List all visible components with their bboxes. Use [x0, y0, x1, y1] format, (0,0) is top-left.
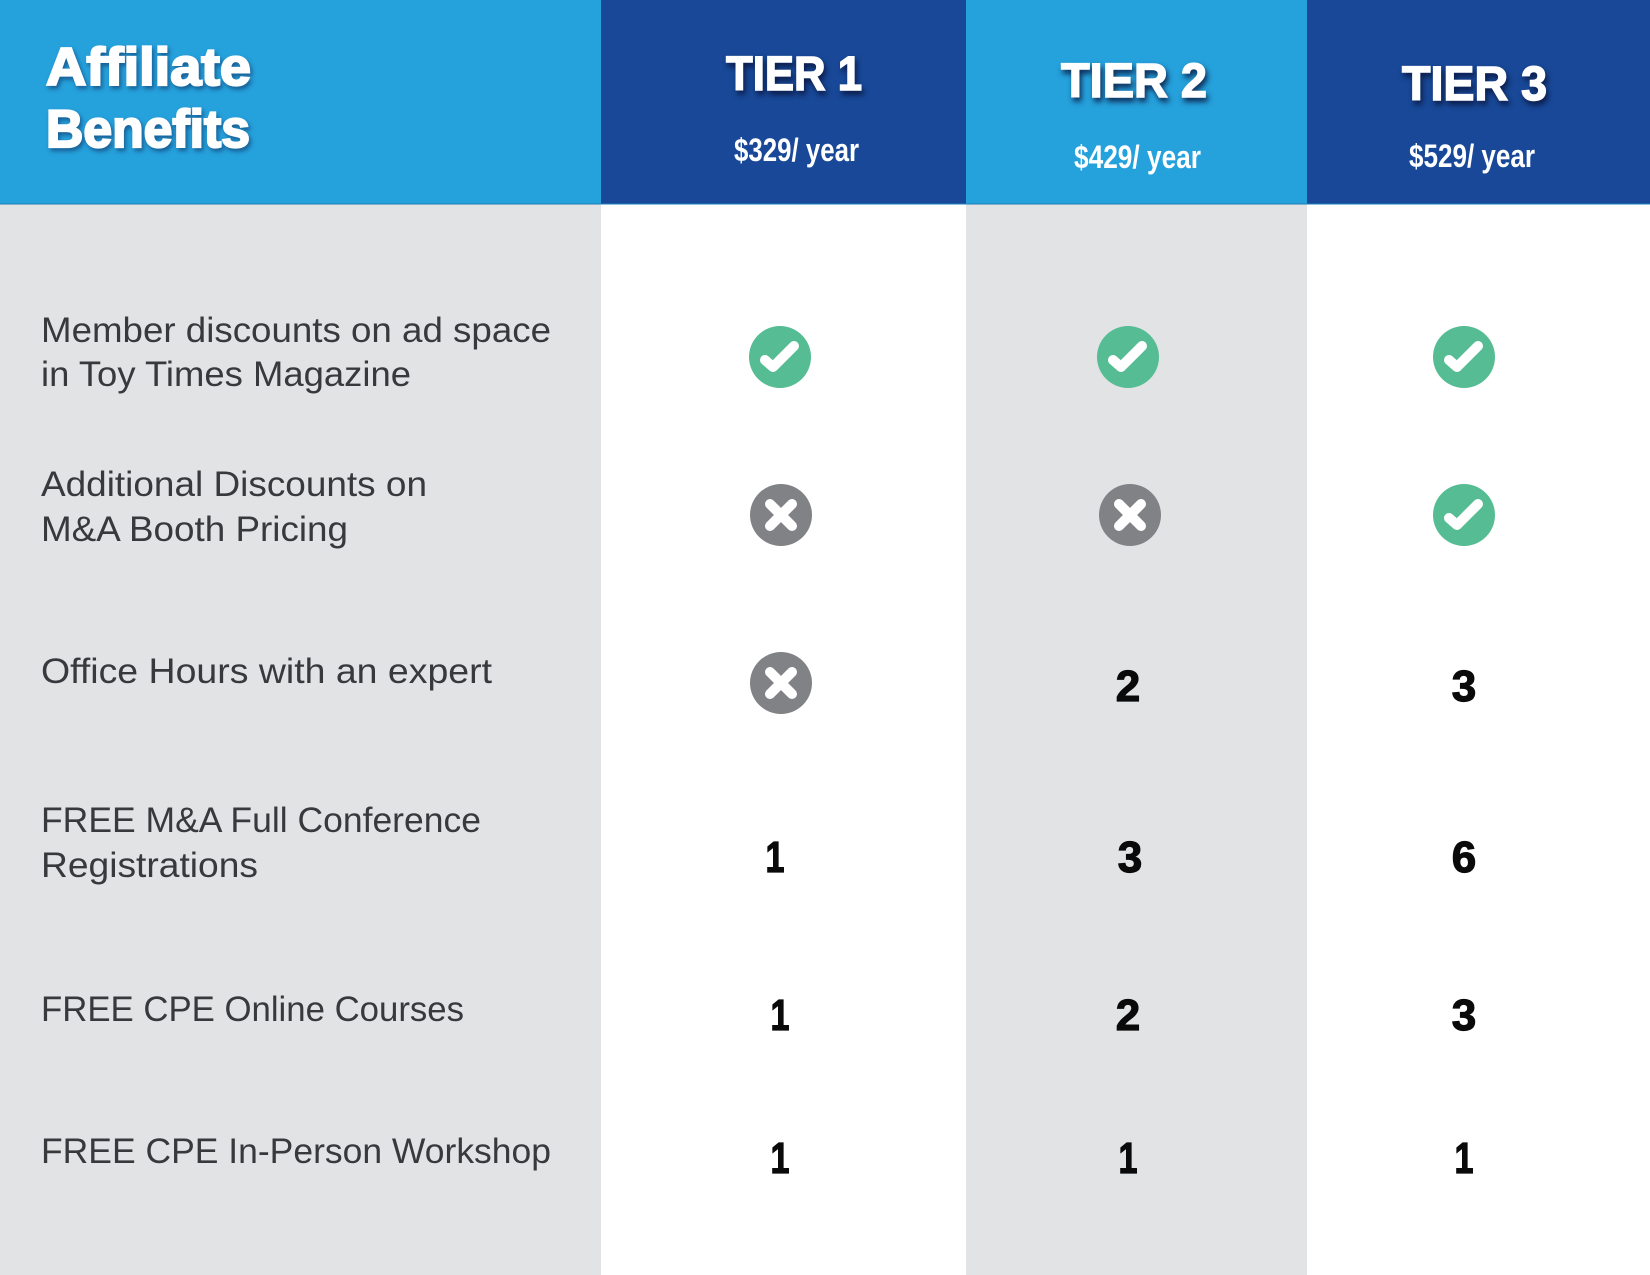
- icon: check tier 3: [1433, 484, 1495, 546]
- benefits column background: [0, 204, 601, 1275]
- row: additional discounts: [41, 465, 1495, 549]
- value tier 1: 1: [766, 833, 784, 882]
- icon: cross tier 1: [750, 484, 812, 546]
- label: additional discounts: M&A Booth Pricing: [41, 510, 348, 549]
- header panel: affiliate benefits: [0, 0, 601, 204]
- value tier 2: 2: [1116, 991, 1140, 1040]
- tier 1 price: $329/ year: [734, 132, 859, 168]
- row: office hours: [41, 652, 1476, 714]
- label: member discounts: Member discounts on ad space: [41, 311, 551, 350]
- value tier 1: 1: [770, 1134, 790, 1183]
- tier 1 name: TIER 1: [726, 48, 862, 101]
- tier 2 price: $429/ year: [1074, 139, 1201, 175]
- tier 3 name: TIER 3: [1402, 58, 1547, 111]
- tier 2 name: TIER 2: [1061, 55, 1207, 108]
- label: in-person workshop: FREE CPE In-Person Workshop: [41, 1132, 551, 1171]
- header panel: tier 3: [1307, 0, 1650, 204]
- row: member discounts: [41, 311, 1495, 394]
- value tier 2: 2: [1116, 662, 1140, 711]
- row: full conference registrations: [41, 801, 1476, 885]
- title: Benefits: [46, 100, 250, 159]
- title: [46, 38, 251, 159]
- icon: check tier 3: [1433, 326, 1495, 388]
- header panel: tier 2: [966, 0, 1307, 204]
- tier 3 price: $529/ year: [1409, 138, 1535, 174]
- icon: cross tier 1: [750, 652, 812, 714]
- icon: check tier 1: [749, 326, 811, 388]
- label: full conference registrations: FREE M&A Full Conference: [41, 801, 481, 840]
- value tier 3: 6: [1452, 833, 1476, 882]
- label: office hours: Office Hours with an expert: [41, 652, 492, 691]
- tier 2 column background: [966, 204, 1307, 1275]
- label: additional discounts: [41, 465, 427, 549]
- value tier 2: 1: [1118, 1134, 1138, 1183]
- label: full conference registrations: [41, 801, 481, 885]
- icon: cross tier 2: [1099, 484, 1161, 546]
- label: online courses: FREE CPE Online Courses: [41, 990, 464, 1029]
- value tier 3: 3: [1452, 662, 1476, 711]
- label: additional discounts: Additional Discounts on: [41, 465, 427, 504]
- label: member discounts: [41, 311, 551, 394]
- label: member discounts: in Toy Times Magazine: [41, 355, 411, 394]
- icon: check tier 2: [1097, 326, 1159, 388]
- title: Affiliate: [46, 38, 251, 97]
- label: full conference registrations: Registrations: [41, 846, 258, 885]
- value tier 1: 1: [770, 991, 790, 1040]
- row: online courses: [41, 990, 1476, 1040]
- value tier 3: 3: [1452, 991, 1476, 1040]
- value tier 3: 1: [1454, 1134, 1474, 1183]
- header panel: tier 1: [601, 0, 966, 204]
- row: in-person workshop: [41, 1132, 1474, 1183]
- value tier 2: 3: [1118, 833, 1142, 882]
